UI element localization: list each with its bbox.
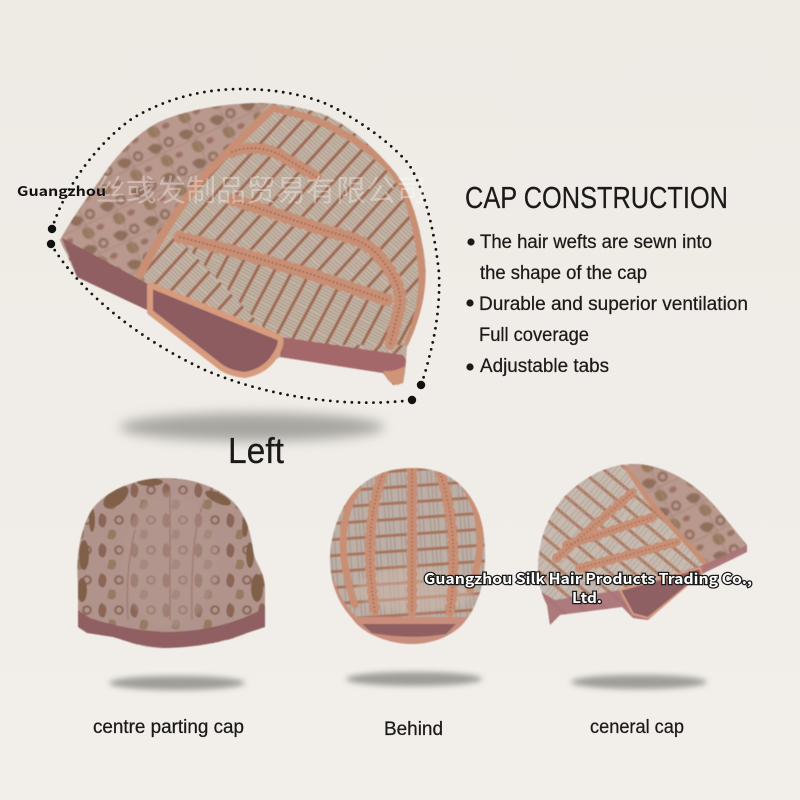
feature list: Durable and superior ventilation xyxy=(479,294,748,315)
cap lace crown xyxy=(60,102,270,282)
watermark: Chinese company name: 丝彧发制品贸易有限公司 xyxy=(96,175,426,208)
caption: ceneral cap: ceneral cap xyxy=(590,717,684,738)
cap hair wefts xyxy=(64,103,426,379)
front band xyxy=(78,608,265,648)
caption: Behind: Behind xyxy=(384,719,443,740)
back strap xyxy=(280,337,406,385)
ground shadow: main cap xyxy=(120,413,384,441)
side hair curls xyxy=(77,478,263,602)
ground shadow: centre parting cap xyxy=(109,676,245,690)
cap braids xyxy=(140,108,422,345)
braids xyxy=(557,468,707,568)
feature list: Full coverage xyxy=(479,325,589,346)
feature list: Adjustable tabs xyxy=(480,356,609,377)
ear flap xyxy=(150,285,281,375)
wefts xyxy=(535,460,750,630)
caption: centre parting cap: centre parting cap xyxy=(93,717,244,738)
dotted outline around main cap xyxy=(47,89,439,404)
feature list xyxy=(466,232,748,377)
main cap: left view xyxy=(50,95,435,390)
ground shadow: general cap xyxy=(571,675,707,689)
feature list: The hair wefts are sewn into xyxy=(480,232,712,253)
vertical braids xyxy=(343,470,480,613)
front band xyxy=(62,238,150,310)
band xyxy=(331,576,470,644)
wefts xyxy=(325,465,490,650)
lace xyxy=(628,464,747,564)
lace body xyxy=(75,475,267,650)
ground shadow: behind cap xyxy=(346,672,482,686)
behind cap xyxy=(325,465,490,650)
watermark: company name xyxy=(424,568,752,608)
feature list: the shape of the cap xyxy=(480,263,647,284)
general cap xyxy=(535,460,750,630)
centre parting cap xyxy=(75,475,267,650)
strap tab xyxy=(383,366,405,385)
watermark: company name: Ltd. xyxy=(572,587,602,608)
label: Left: Left xyxy=(228,430,284,471)
heading: CAP CONSTRUCTION xyxy=(465,180,728,215)
watermark: company name: Guangzhou Silk Hair Products Trading Co., xyxy=(424,568,752,589)
lighter washed area xyxy=(355,568,475,612)
watermark: Guangzhou: Guangzhou xyxy=(17,180,106,200)
back band xyxy=(538,545,747,627)
ear flap xyxy=(620,568,702,618)
